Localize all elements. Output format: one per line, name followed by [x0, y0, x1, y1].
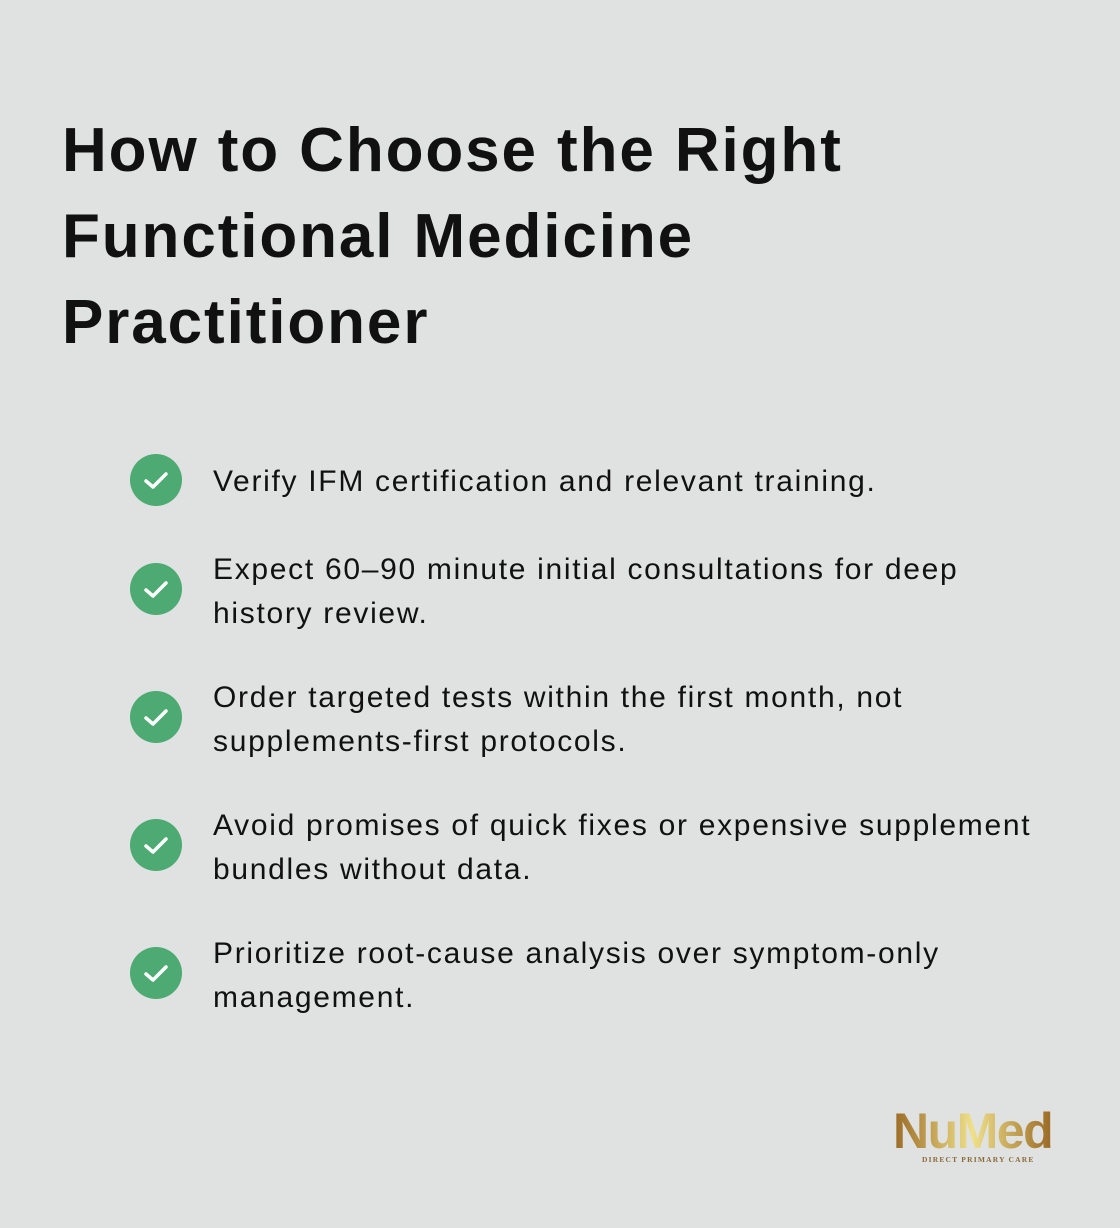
icon: check [130, 563, 182, 615]
logo: DIRECT PRIMARY CARE [922, 1155, 1035, 1164]
text: Verify IFM certification and relevant training. [213, 465, 876, 498]
text [213, 681, 903, 758]
text: management. [213, 981, 415, 1014]
text: Expect 60–90 minute initial consultations for deep [213, 553, 958, 586]
text [213, 553, 958, 630]
text [213, 937, 940, 1014]
text: Order targeted tests within the first month, not [213, 681, 903, 714]
item 4 [130, 809, 1031, 886]
text: supplements-first protocols. [213, 725, 627, 758]
text: bundles without data. [213, 853, 532, 886]
text [213, 809, 1031, 886]
logo: NuMed [893, 1103, 1052, 1159]
title [62, 116, 843, 357]
item 2 [130, 553, 958, 630]
text: history review. [213, 597, 429, 630]
text: Avoid promises of quick fixes or expensive supplement [213, 809, 1031, 842]
icon: check [130, 819, 182, 871]
item 1 [130, 454, 876, 506]
item 5 [130, 937, 940, 1014]
title: Practitioner [62, 288, 429, 357]
item 3 [130, 681, 903, 758]
text: Prioritize root-cause analysis over symptom-only [213, 937, 940, 970]
title: How to Choose the Right [62, 116, 843, 185]
icon: check [130, 454, 182, 506]
icon: check [130, 947, 182, 999]
icon: check [130, 691, 182, 743]
title: Functional Medicine [62, 202, 694, 271]
